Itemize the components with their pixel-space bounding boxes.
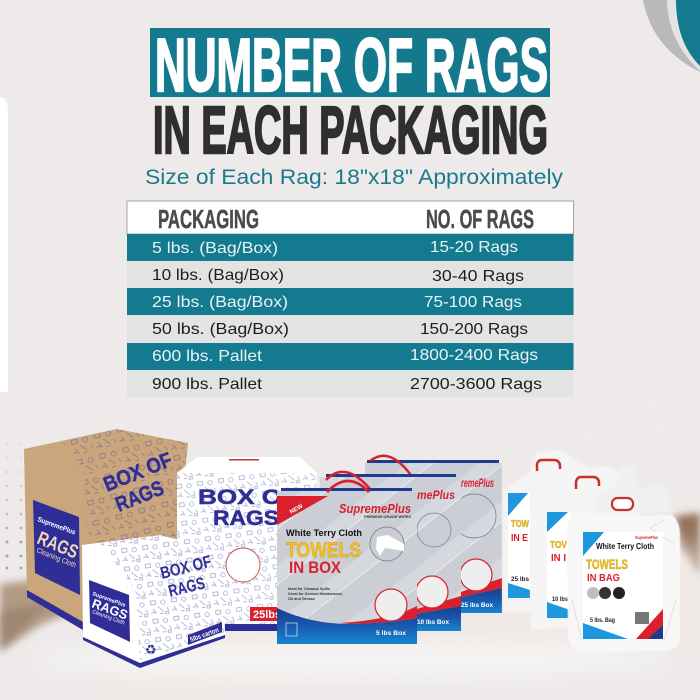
towel box: 10 lbs: [320, 472, 461, 631]
kraft cardboard box: [24, 429, 188, 630]
brand name: SupremePlus: [339, 502, 411, 516]
table header: NO. OF RAGS: [426, 204, 534, 234]
carry handle: [327, 481, 369, 492]
towel box: 5 lbs: [277, 481, 417, 644]
bottom swoosh: [277, 606, 417, 644]
bag: 10 lbs: [531, 466, 640, 630]
icon: hand circle: [370, 527, 404, 561]
towel box: 10 lbs: 10 lbs Box: [417, 620, 450, 626]
row: 600 lbs: [127, 343, 574, 370]
row: 900 lbs: 900 lbs. Pallet: [152, 376, 263, 393]
towel box: 25 lbs: 25 lbs Box: [461, 603, 494, 609]
box label: BOX OF: [100, 448, 176, 497]
wooden surface: [0, 513, 700, 690]
towel box: 10 lbs: mePlus: [417, 488, 455, 502]
bag label: SupremePlus: [635, 535, 658, 540]
brand panel: [89, 580, 130, 642]
row: 50 lbs: 50 lbs. (Bag/Box): [152, 321, 289, 338]
row: 10 lbs: 30-40 Rags: [432, 268, 524, 285]
brand panel: Cleaning Cloth: [91, 609, 125, 627]
illustration: towel circle: [226, 548, 260, 582]
icon: recycle: ♻: [145, 642, 157, 657]
box label: BOX OF: [158, 552, 213, 583]
bag label: White Terry Cloth: [596, 541, 654, 551]
bag: 10 lbs: 10 lbs: [552, 597, 569, 603]
row: 600 lbs: 600 lbs. Pallet: [152, 348, 263, 365]
row: 5 lbs: [127, 234, 574, 261]
bag: 25 lbs: IN E: [511, 533, 528, 544]
box label: BOX OF: [198, 486, 298, 509]
usage note: Ideal for Cleanup Spills: [288, 587, 330, 591]
brand panel: SupremePlus: [36, 516, 76, 537]
bag label: [583, 532, 663, 639]
box label: RAGS: [213, 507, 279, 530]
bag label: IN BAG: [587, 573, 620, 584]
usage note: Great for General Maintenance,: [288, 592, 343, 596]
box label: RAGS: [166, 573, 207, 601]
icon: towel circle: [375, 589, 407, 621]
usage note: Oil and Grease: [288, 597, 315, 601]
brand panel: [33, 500, 81, 595]
row: 10 lbs: 10 lbs. (Bag/Box): [152, 267, 284, 284]
row: 25 lbs: 25 lbs. (Bag/Box): [152, 294, 288, 311]
bag: 10 lbs: TOV: [550, 540, 567, 551]
table header: [127, 201, 574, 234]
25 lbs tag: 25lbs: [253, 609, 281, 621]
bag: 10 lbs: IN I: [551, 553, 566, 564]
icon: seal: [286, 623, 297, 636]
faint diagonal background streaks: [520, 385, 700, 470]
5 lbs carton tag: 5lbs carton: [189, 627, 220, 644]
handle: [612, 498, 633, 510]
product name: White Terry Cloth: [286, 528, 362, 539]
size label: 5 lbs Box: [376, 631, 407, 637]
row: 50 lbs: [127, 315, 574, 343]
brand panel: RAGS: [90, 596, 130, 623]
bag label: TOWELS: [586, 556, 628, 572]
brand panel: SupremePlus: [91, 591, 126, 609]
bag: 5 lbs: [567, 467, 680, 652]
product name: IN BOX: [289, 558, 342, 577]
dot grid: [6, 443, 22, 570]
small white 5 lbs carton: [82, 535, 225, 668]
row: 50 lbs: 150-200 Rags: [420, 321, 528, 338]
new corner: NEW: [289, 503, 304, 516]
white side panel: [0, 97, 8, 392]
brand panel: RAGS: [34, 528, 81, 563]
box label: [198, 486, 298, 530]
product name: [286, 528, 362, 577]
subtitle: Size of Each Rag: 18"x18" Approximately: [145, 166, 564, 189]
bag label: 5 lbs. Bag: [590, 618, 615, 624]
brand panel: Cleaning Cloth: [35, 546, 78, 570]
table header: PACKAGING: [158, 204, 259, 234]
bag: 25 lbs: TOW: [511, 519, 529, 530]
table: [127, 201, 574, 397]
row: 25 lbs: [127, 288, 574, 315]
decorative corner circle: [643, 0, 700, 72]
new corner: [277, 496, 328, 525]
towel box: 25 lbs: [365, 456, 502, 613]
row: 600 lbs: 1800-2400 Rags: [410, 347, 538, 364]
bag: 25 lbs: [503, 450, 590, 612]
bag: 25 lbs: 25 lbs: [511, 577, 530, 583]
row: 10 lbs: [127, 261, 574, 288]
box label: [158, 552, 213, 601]
brand name: PREMIUM GRADE WIPES: [364, 515, 411, 519]
row: 900 lbs: 2700-3600 Rags: [410, 376, 542, 393]
box label: [100, 448, 176, 517]
towel box: 25 lbs: remePlus: [461, 476, 494, 490]
usage note: [288, 587, 343, 601]
row: 5 lbs: 5 lbs. (Bag/Box): [152, 240, 278, 257]
row: 5 lbs: 15-20 Rags: [430, 239, 518, 256]
product name: TOWELS: [286, 539, 361, 562]
white 25 lbs box: [177, 457, 317, 631]
row: 900 lbs: [127, 370, 574, 397]
row: 25 lbs: 75-100 Rags: [424, 294, 522, 311]
box label: RAGS: [112, 477, 167, 517]
